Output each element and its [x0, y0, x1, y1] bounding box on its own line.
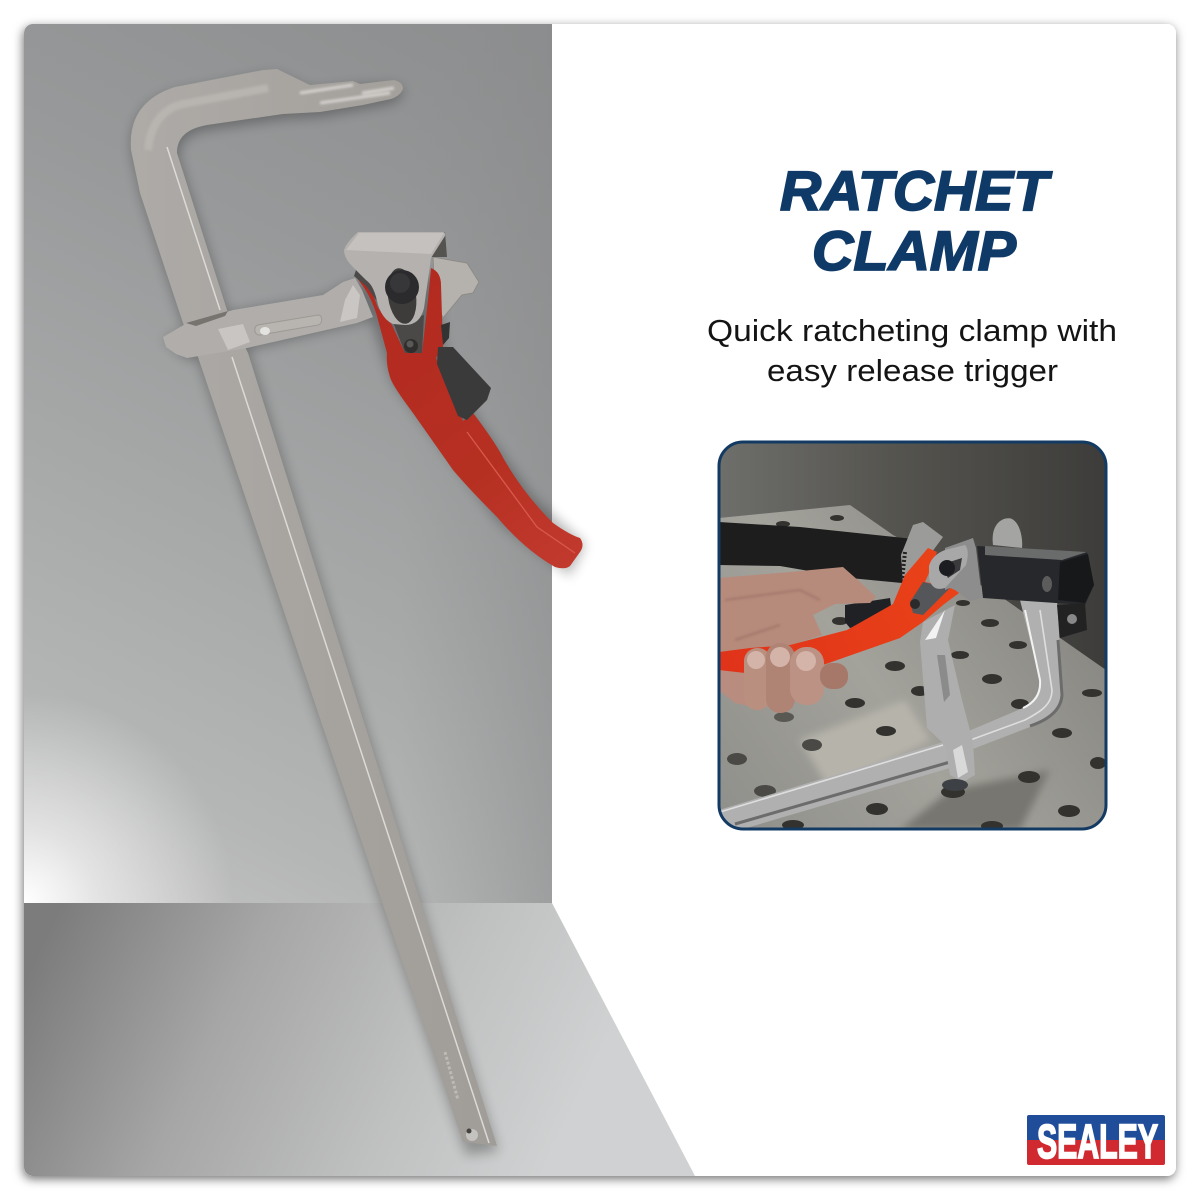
frame jaw detail: [300, 85, 394, 103]
logo: Sealey: [1027, 1115, 1165, 1169]
ratchet plate: [901, 522, 943, 585]
red handle: [355, 268, 582, 568]
stop disc: [993, 518, 1022, 548]
sliding arm: [163, 278, 373, 358]
clamp frame: [719, 600, 1063, 832]
subtitle: [707, 313, 1117, 388]
movable jaw arm: [920, 605, 975, 791]
title: [780, 159, 1053, 282]
lower bracket: [1057, 603, 1087, 638]
bracket bolt: [939, 558, 962, 578]
handle highlight: [467, 432, 575, 553]
arm slot: [255, 315, 322, 335]
collar highlight: [218, 324, 250, 350]
logo blue band: [1027, 1115, 1165, 1140]
black trigger: [437, 347, 491, 420]
ratchet teeth plate: [433, 257, 479, 318]
head bracket: [929, 538, 980, 593]
head bracket: [344, 232, 447, 326]
trigger latch: [441, 322, 450, 345]
backdrop wall: [24, 24, 552, 903]
workshop background: [720, 444, 1104, 669]
black beam: [720, 522, 908, 583]
fingers: [719, 643, 848, 713]
product: ratchet clamp: [131, 69, 585, 1155]
bracket bolt: [384, 266, 420, 326]
clamp shadow: [132, 75, 585, 1155]
title line 2: CLAMP: [812, 219, 1017, 282]
panel: product backdrop: [24, 24, 695, 1176]
inset photo: clamp in use: [719, 442, 1106, 832]
backdrop floor: [24, 903, 695, 1176]
bracket top face: [346, 233, 444, 254]
bar highlight edge: [167, 147, 489, 1143]
logo red band: [1027, 1140, 1165, 1165]
arm neck highlight: [340, 285, 360, 322]
perforated table: [719, 505, 1106, 831]
subtitle line 1: Quick ratcheting clamp with: [707, 313, 1117, 348]
pivot plate: [910, 582, 950, 615]
photo border: [719, 442, 1106, 829]
hand, back of palm: [720, 567, 876, 652]
stamped bar marking: [445, 1052, 458, 1100]
bar end bolt: [466, 1128, 478, 1141]
steel bar frame: [131, 69, 497, 1146]
trigger: [845, 598, 893, 628]
frame ridge shading: [148, 88, 268, 150]
black square tube: [977, 518, 1094, 638]
handle pivot plate: [393, 315, 424, 353]
red handle: [719, 548, 963, 673]
subtitle line 2: easy release trigger: [767, 353, 1058, 388]
title line 1: RATCHET: [780, 159, 1053, 222]
